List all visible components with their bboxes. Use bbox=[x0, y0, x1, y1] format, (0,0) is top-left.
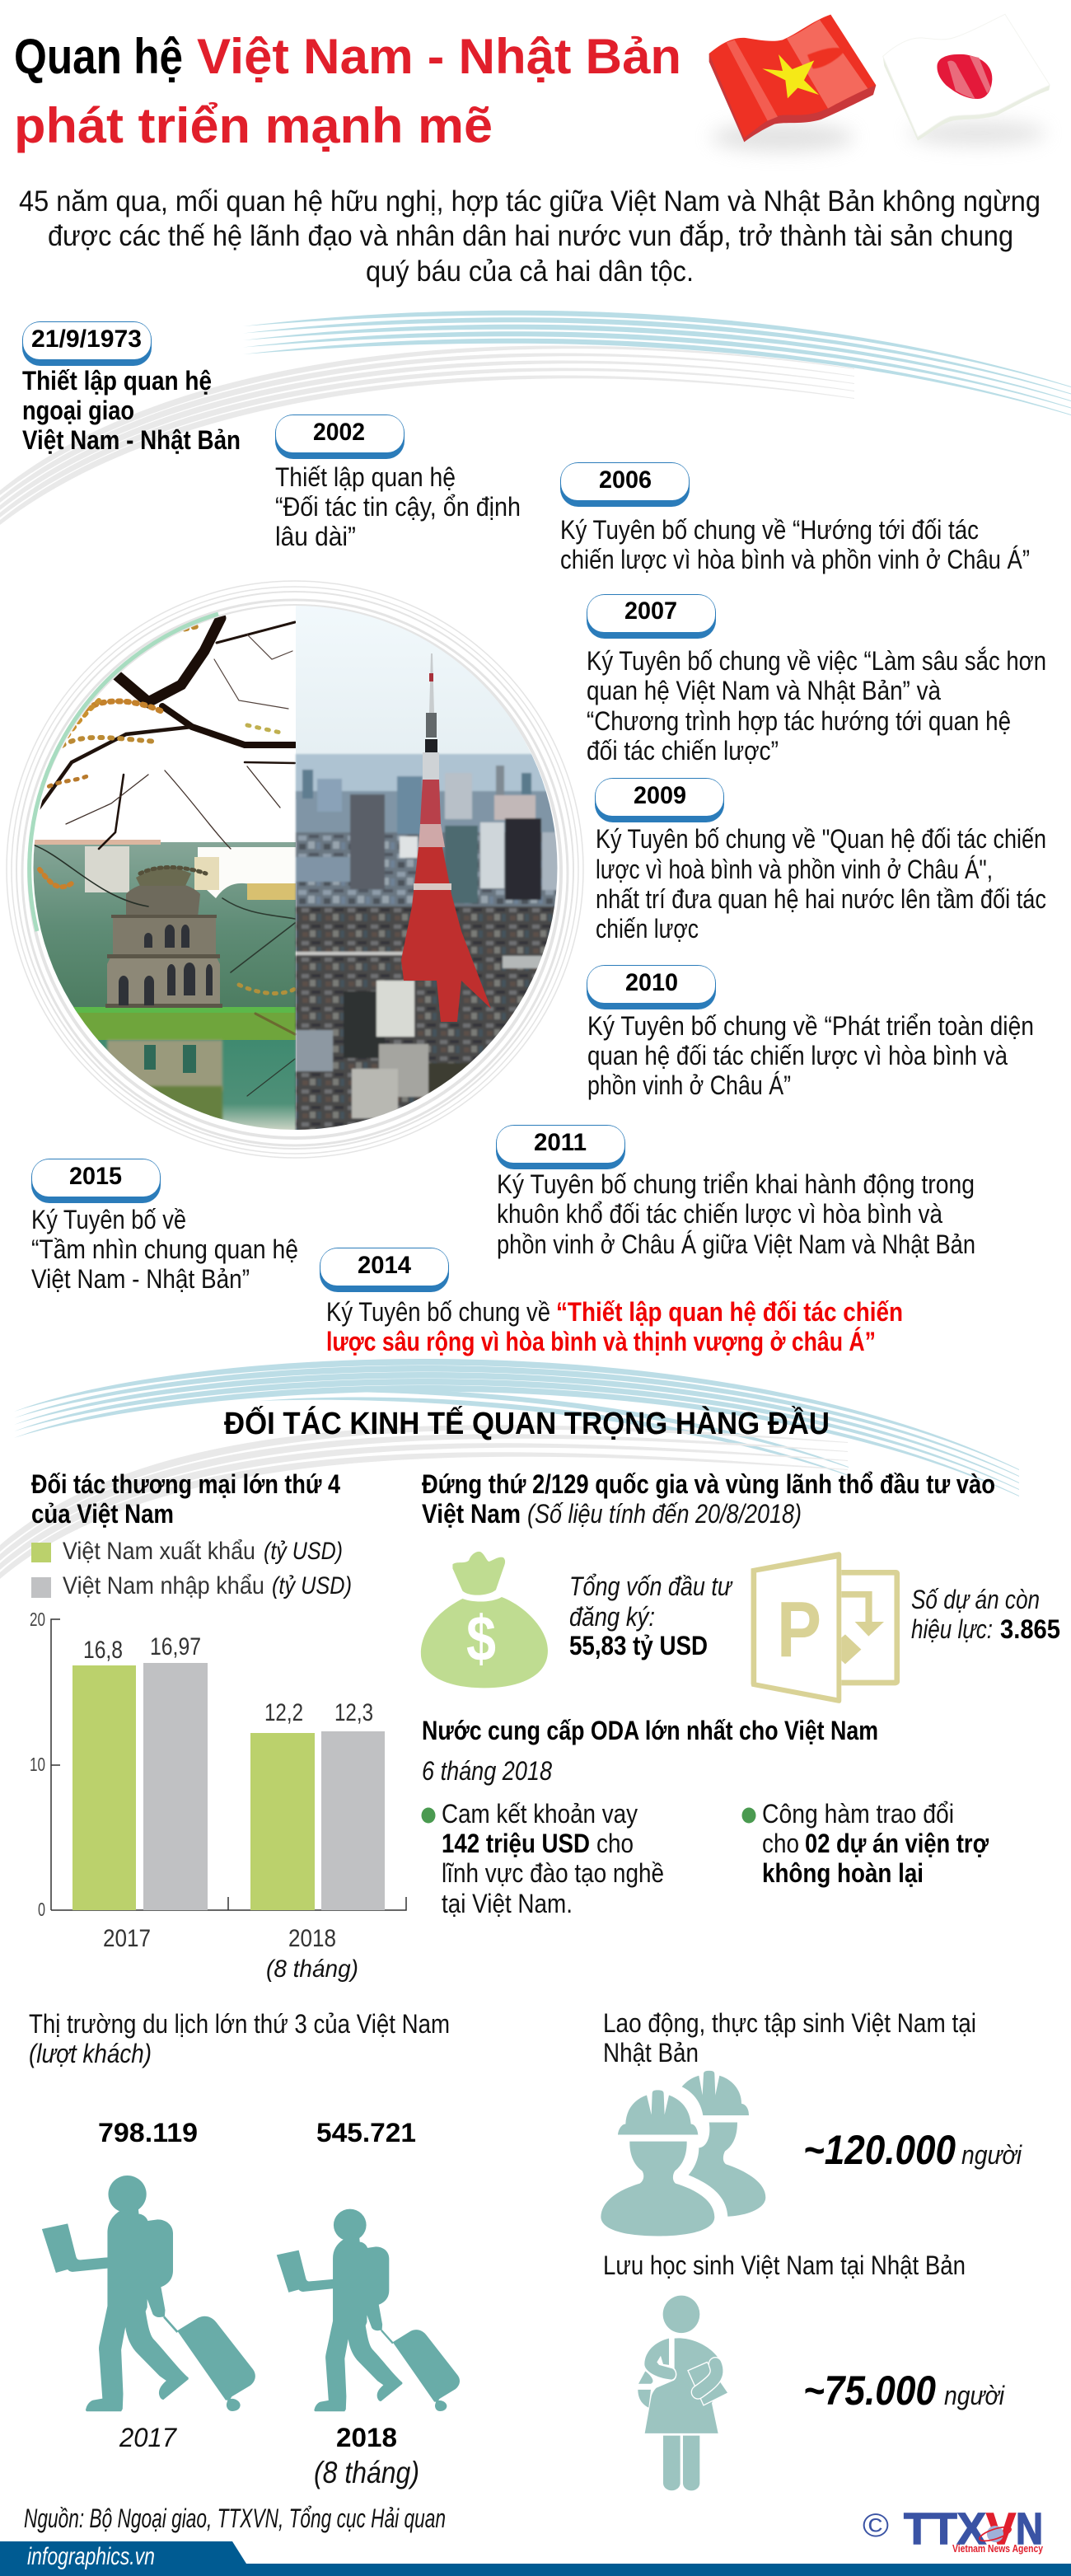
tourist figure 2018: 2018 bbox=[336, 2423, 397, 2452]
workers count: ~120.000 bbox=[803, 2127, 956, 2173]
event text bbox=[31, 1205, 298, 1294]
year badge bbox=[22, 321, 152, 366]
event text bbox=[587, 1011, 1034, 1100]
footer bar bbox=[0, 2541, 1071, 2576]
event text: ngoại giao bbox=[22, 396, 134, 425]
valid projects text: hiệu lực: bbox=[911, 1614, 993, 1644]
event text: Việt Nam - Nhật Bản” bbox=[31, 1264, 250, 1294]
photo montage: Hanoi and Tokyo bbox=[7, 581, 583, 1158]
timeline: 2002 bbox=[275, 415, 521, 551]
event text: Ký Tuyên bố về bbox=[31, 1205, 186, 1234]
event text: “Đối tác tin cậy, ổn định bbox=[275, 492, 521, 522]
ODA bullet: loan: tại Việt Nam. bbox=[442, 1889, 573, 1918]
source note: Nguồn: Bộ Ngoại giao, TTXVN, Tổng cục Hải quan bbox=[24, 2503, 446, 2533]
year badge bbox=[560, 462, 690, 507]
timeline: 2006 bbox=[560, 462, 1030, 574]
ODA bullet: loan: Cam kết khoản vay bbox=[442, 1799, 638, 1829]
total investment text: đăng ký: bbox=[569, 1602, 655, 1632]
year badge: 2015 bbox=[69, 1163, 122, 1190]
logo: TTXVN: © bbox=[863, 2508, 889, 2544]
event text: Thiết lập quan hệ bbox=[275, 462, 456, 492]
icon: workers with helmets bbox=[601, 2071, 765, 2236]
event text: phồn vinh ở Châu Á giữa Việt Nam và Nhật Bản bbox=[497, 1229, 975, 1259]
photo: Tokyo Tower bbox=[296, 602, 568, 1133]
panel: trade partner bbox=[30, 1469, 406, 1983]
event text: Ký Tuyên bố chung về bbox=[326, 1297, 550, 1327]
bar chart: 20 bbox=[30, 1609, 45, 1630]
event text: Ký Tuyên bố chung về “Hướng tới đối tác bbox=[560, 515, 979, 545]
tourist figure 2018: (8 tháng) bbox=[314, 2456, 419, 2489]
tourism heading bbox=[29, 2009, 450, 2068]
event text: đối tác chiến lược” bbox=[587, 736, 779, 766]
year badge: 2009 bbox=[634, 782, 686, 809]
bar chart: (8 tháng) bbox=[266, 1955, 358, 1983]
logo: TTXVN: V bbox=[986, 2504, 1016, 2554]
total investment text bbox=[569, 1571, 733, 1660]
event text: lược vì hoà bình và phồn vinh ở Châu Á", bbox=[596, 855, 993, 884]
event text: chiến lược bbox=[596, 914, 699, 944]
ODA bullet: grant: Công hàm trao đổi bbox=[762, 1799, 954, 1829]
event text: “Chương trình hợp tác hướng tới quan hệ bbox=[587, 706, 1011, 736]
photo: Turtle Tower, Hanoi bbox=[25, 602, 296, 1137]
year badge: 2006 bbox=[599, 466, 652, 494]
year badge bbox=[496, 1125, 625, 1169]
bar chart: 16,8 bbox=[83, 1637, 123, 1664]
chart legend: (tỷ USD) bbox=[272, 1572, 352, 1599]
bar chart: 2018 bbox=[288, 1925, 336, 1952]
year badge bbox=[275, 415, 405, 459]
investment heading: Việt Nam bbox=[422, 1499, 521, 1529]
year badge bbox=[595, 778, 724, 822]
logo: TTXVN: TTX bbox=[904, 2504, 986, 2554]
year badge bbox=[587, 594, 716, 639]
year badge: 2014 bbox=[358, 1252, 411, 1279]
ODA heading bbox=[422, 1716, 878, 1786]
logo: TTXVN bbox=[863, 2504, 1044, 2555]
chart legend: Việt Nam nhập khẩu bbox=[63, 1572, 264, 1599]
event text: quan hệ đối tác chiến lược vì hòa bình và bbox=[587, 1041, 1008, 1070]
event text bbox=[497, 1169, 975, 1259]
trade heading bbox=[31, 1469, 340, 1529]
intro paragraph: được các thế hệ lãnh đạo và nhân dân hai nước vun đắp, trở thành tài sản chung bbox=[48, 220, 1013, 252]
icon: money bag bbox=[421, 1552, 548, 1688]
timeline: 2015 bbox=[31, 1159, 298, 1294]
year badge: 2007 bbox=[624, 597, 677, 625]
logo: TTXVN: Vietnam News Agency bbox=[952, 2542, 1044, 2555]
icon: money bag: $ bbox=[466, 1602, 496, 1674]
timeline: 2014 bbox=[320, 1248, 903, 1356]
investment heading bbox=[422, 1469, 995, 1529]
timeline: 2011 bbox=[496, 1125, 975, 1259]
valid projects text bbox=[911, 1585, 1060, 1644]
ODA bullet: loan: 142 triệu USD bbox=[442, 1829, 590, 1858]
timeline: 2009 bbox=[595, 778, 1046, 944]
year badge: 21/9/1973 bbox=[31, 326, 142, 353]
tourist figure 2018 bbox=[277, 2118, 460, 2489]
tourist figure 2018: 545.721 bbox=[316, 2118, 416, 2147]
valid projects text: Số dự án còn bbox=[911, 1585, 1040, 1614]
event text bbox=[587, 646, 1046, 766]
title: phát triển mạnh mẽ bbox=[14, 98, 493, 153]
workers text: Lao động, thực tập sinh Việt Nam tại bbox=[603, 2008, 976, 2038]
total investment text: 55,83 tỷ USD bbox=[569, 1631, 708, 1660]
icon: Vietnam flag bbox=[709, 15, 876, 142]
tourist figure 2017: 2017 bbox=[119, 2423, 177, 2452]
title: Việt Nam - Nhật Bản bbox=[197, 29, 681, 84]
year badge: 2011 bbox=[534, 1129, 587, 1156]
event text bbox=[326, 1297, 903, 1356]
timeline: 2010 bbox=[587, 965, 1034, 1100]
event text bbox=[560, 515, 1030, 574]
event text: lược sâu rộng vì hòa bình và thịnh vượng ở châu Á” bbox=[326, 1327, 876, 1356]
ODA bullet: loan: cho bbox=[596, 1829, 634, 1858]
event text: Ký Tuyên bố chung triển khai hành động trong bbox=[497, 1169, 975, 1199]
event text bbox=[275, 462, 521, 551]
workers text bbox=[603, 2008, 976, 2068]
ODA heading: Nước cung cấp ODA lớn nhất cho Việt Nam bbox=[422, 1716, 878, 1745]
year badge: 2010 bbox=[625, 969, 678, 996]
workers text: Nhật Bản bbox=[603, 2038, 699, 2068]
bar chart: 16,97 bbox=[150, 1633, 201, 1660]
panel: investment bbox=[421, 1469, 1060, 1703]
chart legend: (tỷ USD) bbox=[264, 1538, 343, 1565]
bar chart bbox=[30, 1609, 406, 1983]
event text bbox=[596, 824, 1046, 944]
event text: Việt Nam - Nhật Bản bbox=[22, 425, 241, 455]
chart legend bbox=[31, 1538, 352, 1599]
bar chart: 12,3 bbox=[334, 1699, 373, 1726]
tourist figure 2017: 798.119 bbox=[98, 2118, 198, 2147]
panel: ODA bbox=[422, 1716, 989, 1918]
students text: Lưu học sinh Việt Nam tại Nhật Bản bbox=[603, 2250, 966, 2280]
intro paragraph: quý báu của cả hai dân tộc. bbox=[366, 255, 694, 288]
panel: students bbox=[603, 2250, 1005, 2490]
trade heading: của Việt Nam bbox=[31, 1499, 174, 1529]
ODA bullet: grant bbox=[741, 1799, 989, 1888]
icon: Japan flag bbox=[883, 14, 1050, 141]
event text bbox=[22, 366, 241, 455]
icon: student bbox=[638, 2296, 728, 2490]
title bbox=[14, 29, 681, 153]
tourism heading: (lượt khách) bbox=[29, 2039, 152, 2068]
icon: project document: P bbox=[777, 1585, 821, 1674]
event text: quan hệ Việt Nam và Nhật Bản” và bbox=[587, 676, 941, 705]
event text: khuôn khổ đối tác chiến lược vì hòa bình và bbox=[497, 1199, 942, 1229]
year badge bbox=[320, 1248, 449, 1292]
tourist figure 2017 bbox=[42, 2118, 255, 2452]
trade heading: Đối tác thương mại lớn thứ 4 bbox=[31, 1469, 340, 1499]
year badge: 2002 bbox=[313, 419, 365, 446]
chart legend: Việt Nam xuất khẩu bbox=[63, 1538, 255, 1565]
event text: “Tầm nhìn chung quan hệ bbox=[31, 1234, 298, 1264]
investment heading: (Số liệu tính đến 20/8/2018) bbox=[527, 1499, 802, 1529]
event text: “Thiết lập quan hệ đối tác chiến bbox=[556, 1297, 903, 1327]
bar chart: 10 bbox=[30, 1754, 45, 1775]
timeline: 2007 bbox=[587, 594, 1046, 766]
tourism heading: Thị trường du lịch lớn thứ 3 của Việt Nam bbox=[29, 2009, 450, 2039]
section heading: ĐỐI TÁC KINH TẾ QUAN TRỌNG HÀNG ĐẦU bbox=[224, 1404, 830, 1441]
students count: ~75.000 bbox=[803, 2368, 936, 2414]
logo: TTXVN: N bbox=[1016, 2504, 1043, 2554]
year badge bbox=[31, 1159, 161, 1203]
event text: lâu dài” bbox=[275, 522, 356, 551]
event text: Thiết lập quan hệ bbox=[22, 366, 212, 396]
timeline: 21/9/1973 bbox=[22, 321, 241, 455]
panel: workers and trainees bbox=[601, 2008, 1022, 2236]
ODA bullet: grant: 02 dự án viện trợ bbox=[805, 1829, 989, 1858]
total investment text: Tổng vốn đầu tư bbox=[569, 1571, 733, 1601]
students count: người bbox=[944, 2381, 1005, 2410]
panel: tourism bbox=[29, 2009, 460, 2489]
bar chart: 0 bbox=[38, 1899, 45, 1920]
valid projects text: 3.865 bbox=[1000, 1614, 1060, 1644]
intro paragraph bbox=[19, 185, 1041, 288]
ODA bullet: loan bbox=[422, 1799, 664, 1918]
icon: project document bbox=[751, 1552, 900, 1703]
ODA heading: 6 tháng 2018 bbox=[422, 1756, 552, 1786]
icon: flags of Vietnam and Japan bbox=[709, 14, 1050, 151]
workers count: người bbox=[961, 2140, 1022, 2170]
ODA bullet: loan: lĩnh vực đào tạo nghề bbox=[442, 1858, 664, 1888]
footer bar: infographics.vn bbox=[27, 2543, 155, 2570]
bar chart: 2017 bbox=[103, 1925, 151, 1952]
bar chart: 12,2 bbox=[264, 1699, 303, 1726]
year badge bbox=[587, 965, 716, 1009]
event text: phồn vinh ở Châu Á” bbox=[587, 1070, 791, 1100]
ODA bullet: grant: không hoàn lại bbox=[762, 1858, 924, 1888]
ODA bullet: grant: cho bbox=[762, 1829, 799, 1858]
title: Quan hệ bbox=[14, 29, 183, 84]
